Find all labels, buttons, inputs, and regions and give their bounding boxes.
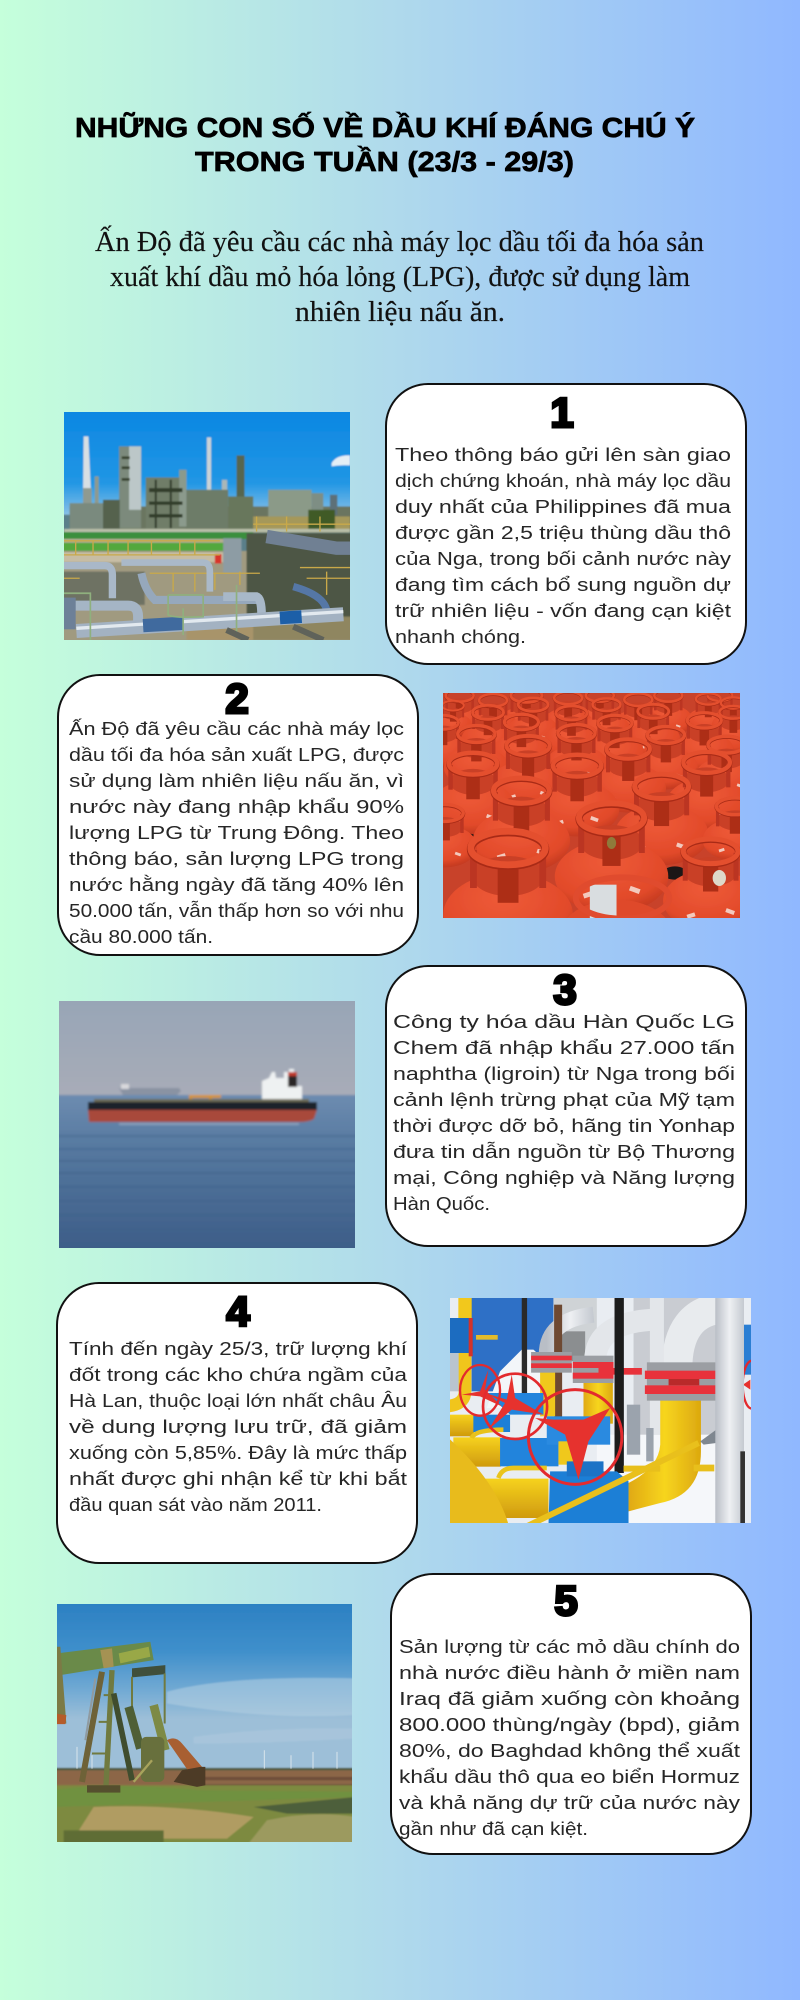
title [75, 111, 695, 177]
body text 2: thông báo, sản lượng LPG trong [69, 849, 404, 869]
body text 1: trữ nhiên liệu - vốn đang cạn kiệt [395, 601, 731, 621]
number 4: 4 [226, 1288, 250, 1335]
photo: gas valves [450, 1298, 751, 1523]
body text 4: Hà Lan, thuộc loại lớn nhất châu Âu [69, 1391, 407, 1411]
number 5: 5 [554, 1577, 578, 1624]
body text 1: được gần 2,5 triệu thùng dầu thô [395, 523, 731, 543]
body text 1: đang tìm cách bổ sung nguồn dự [395, 575, 731, 595]
body text 2: sử dụng làm nhiên liệu nấu ăn, vì [69, 771, 404, 791]
body text 4: đầu quan sát vào năm 2011. [69, 1495, 322, 1515]
body text 3: cảnh lệnh trừng phạt của Mỹ tạm [393, 1090, 735, 1110]
body text 4: về dung lượng lưu trữ, đã giảm [69, 1417, 407, 1437]
body text 3: Công ty hóa dầu Hàn Quốc LG [393, 1012, 735, 1032]
body text 3: mại, Công nghiệp và Năng lượng [393, 1168, 735, 1188]
panel: card 2 [58, 675, 418, 955]
body text 5: Iraq đã giảm xuống còn khoảng [399, 1689, 740, 1709]
body text 5: khẩu dầu thô qua eo biển Hormuz [399, 1767, 740, 1787]
body text 3 [393, 1012, 735, 1214]
body text 1: dịch chứng khoán, nhà máy lọc dầu [395, 471, 731, 491]
body text 5: nhà nước điều hành ở miền nam [399, 1663, 740, 1683]
panel: card 5 [391, 1574, 751, 1854]
number 2: 2 [225, 675, 249, 722]
subtitle: Ấn Độ đã yêu cầu các nhà máy lọc dầu tối đa hóa sản [95, 226, 704, 258]
number 3: 3 [553, 966, 577, 1013]
body text 1: Theo thông báo gửi lên sàn giao [395, 445, 731, 465]
body text 4: nhất được ghi nhận kể từ khi bắt [69, 1468, 407, 1489]
number 1: 1 [550, 389, 574, 436]
body text 4: Tính đến ngày 25/3, trữ lượng khí [69, 1339, 407, 1359]
body text 3: Hàn Quốc. [393, 1194, 490, 1214]
body text 5: 800.000 thùng/ngày (bpd), giảm [399, 1715, 740, 1735]
body text 2: nước này đang nhập khẩu 90% [69, 797, 404, 817]
body text 5: Sản lượng từ các mỏ dầu chính do [399, 1637, 740, 1657]
body text 2 [69, 718, 404, 947]
photo: gas cylinders [443, 693, 740, 918]
subtitle [95, 226, 704, 328]
subtitle: xuất khí dầu mỏ hóa lỏng (LPG), được sử dụng làm [110, 262, 690, 293]
body text 2: cầu 80.000 tấn. [69, 927, 213, 947]
body text 3: thời được dỡ bỏ, hãng tin Yonhap [393, 1116, 735, 1136]
title: NHỮNG CON SỐ VỀ DẦU KHÍ ĐÁNG CHÚ Ý [75, 111, 695, 143]
body text 4 [69, 1339, 408, 1515]
body text 1: nhanh chóng. [395, 627, 526, 647]
body text 4: đốt trong các kho chứa ngầm của [69, 1365, 408, 1385]
photo: refinery [64, 412, 350, 640]
body text 1: duy nhất của Philippines đã mua [395, 497, 732, 517]
body text 3: đưa tin dẫn nguồn từ Bộ Thương [393, 1141, 735, 1162]
body text 3: Chem đã nhập khẩu 27.000 tấn [393, 1038, 735, 1058]
panel: card 3 [386, 966, 746, 1246]
body text 2: dầu tối đa hóa sản xuất LPG, được [69, 745, 404, 765]
photo: oil tanker [59, 1001, 355, 1248]
body text 2: nước hằng ngày đã tăng 40% lên [69, 874, 404, 895]
title: TRONG TUẦN (23/3 - 29/3) [195, 146, 574, 177]
body text 3: naphtha (ligroin) từ Nga trong bối [393, 1064, 735, 1084]
subtitle: nhiên liệu nấu ăn. [295, 297, 505, 328]
body text 2: Ấn Độ đã yêu cầu các nhà máy lọc [69, 718, 404, 739]
body text 1 [395, 445, 732, 647]
photo: oil pumpjack [57, 1604, 352, 1842]
body text 5: 80%, do Baghdad không thể xuất [399, 1741, 740, 1761]
body text 1: của Nga, trong bối cảnh nước này [395, 549, 731, 569]
body text 2: lượng LPG từ Trung Đông. Theo [69, 823, 404, 843]
body text 4: xuống còn 5,85%. Đây là mức thấp [69, 1443, 407, 1463]
body text 5 [399, 1637, 740, 1839]
body text 2: 50.000 tấn, vẫn thấp hơn so với nhu [69, 900, 404, 921]
panel: card 1 [386, 384, 746, 664]
body text 5: và khả năng dự trữ của nước này [399, 1793, 740, 1813]
panel: card 4 [57, 1283, 417, 1563]
body text 5: gần như đã cạn kiệt. [399, 1819, 588, 1839]
